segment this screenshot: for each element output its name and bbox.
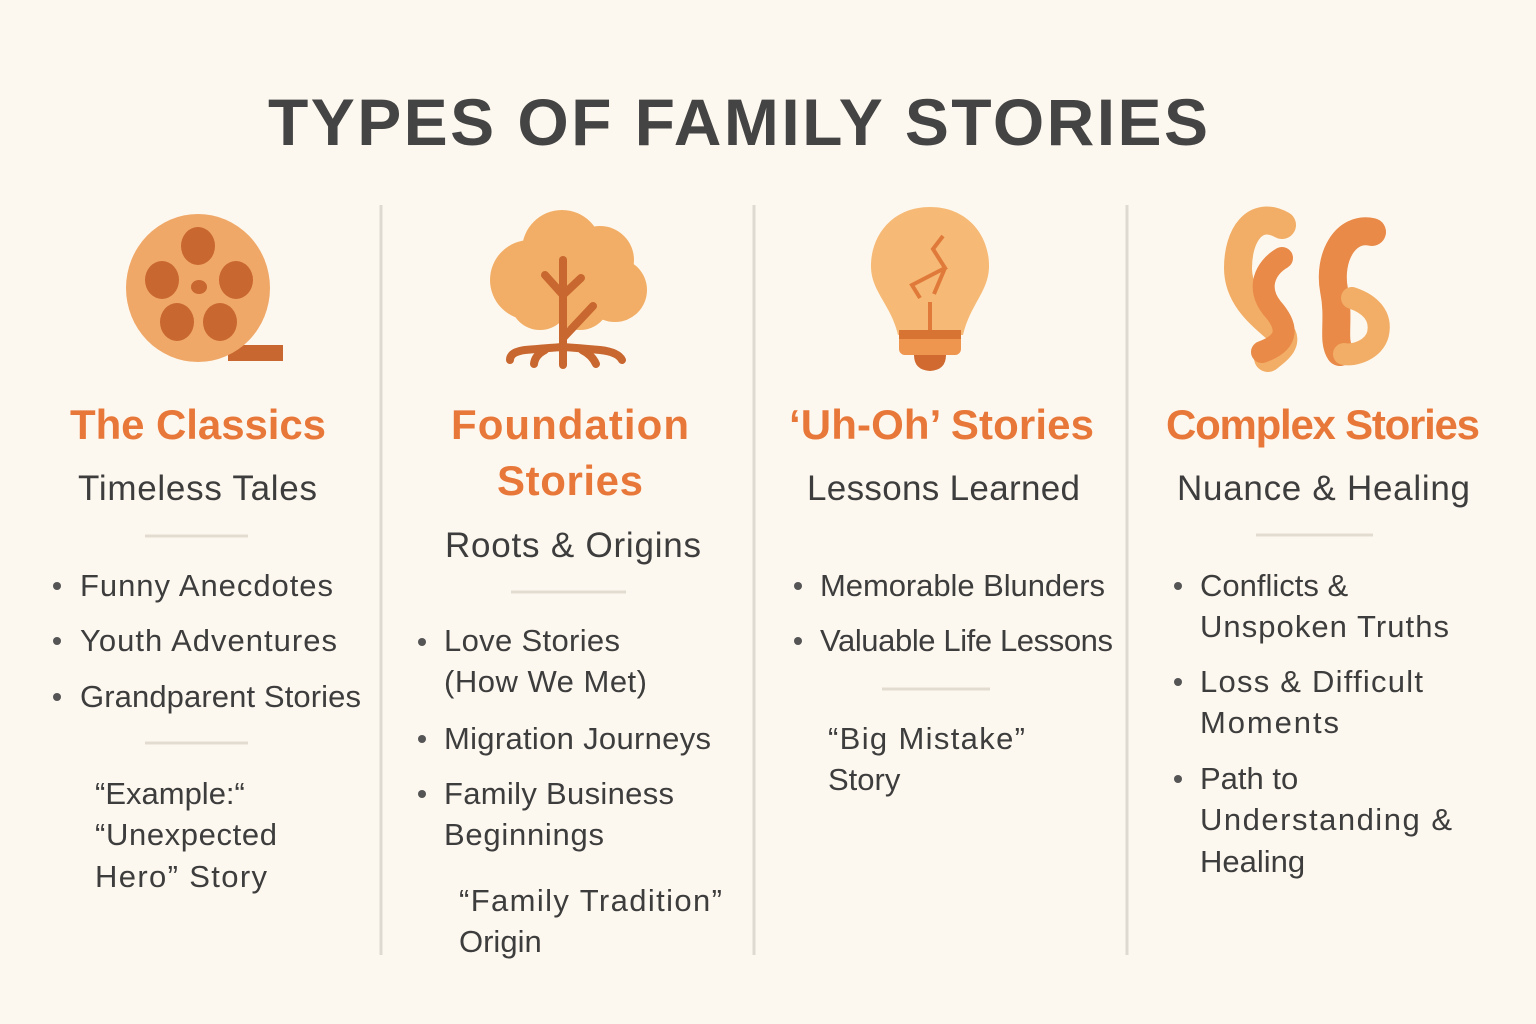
bullet list: Moments — [1200, 705, 1339, 740]
title: TYPES OF FAMILY STORIES — [268, 85, 1208, 159]
bullet list: Funny Anecdotes — [80, 568, 333, 603]
bullet list: Unspoken Truths — [1200, 609, 1449, 644]
heading: ‘Uh-Oh’ Stories — [789, 401, 1094, 448]
example text — [828, 721, 1025, 797]
example text: Origin — [459, 924, 542, 959]
icon: light bulb — [871, 207, 989, 371]
bullet list: Family Business — [444, 776, 674, 811]
example text: “Family Tradition” — [459, 883, 722, 918]
bullet list: Conflicts & — [1200, 568, 1348, 603]
bullet list: Healing — [1200, 844, 1305, 879]
example text: “Unexpected — [95, 817, 277, 852]
bullet list: Loss & Difficult — [1200, 664, 1423, 699]
bullet list — [418, 623, 711, 852]
bullet list — [1174, 568, 1452, 879]
panel: uh-oh stories — [789, 207, 1113, 797]
bullet list: Memorable Blunders — [820, 568, 1105, 603]
heading — [451, 401, 689, 504]
example text: Story — [828, 762, 901, 797]
panel: foundation stories — [418, 210, 722, 959]
heading: The Classics — [70, 401, 326, 448]
icon: intertwined shapes — [1238, 221, 1379, 358]
bullet list: (How We Met) — [444, 664, 647, 699]
panel: complex stories — [1166, 221, 1480, 879]
bullet list — [53, 568, 361, 714]
icon: tree — [490, 210, 647, 365]
icon: film reel — [126, 214, 283, 362]
example text: “Big Mistake” — [828, 721, 1025, 756]
subtitle: Nuance & Healing — [1177, 469, 1470, 508]
bullet list: Grandparent Stories — [80, 679, 361, 714]
bullet list: Love Stories — [444, 623, 620, 658]
bullet list: Beginnings — [444, 817, 604, 852]
example text — [95, 776, 277, 894]
subtitle: Roots & Origins — [445, 526, 701, 565]
example text: Hero” Story — [95, 859, 268, 894]
bullet list: Path to — [1200, 761, 1298, 796]
example text: “Example:“ — [95, 776, 245, 811]
bullet list: Youth Adventures — [80, 623, 337, 658]
bullet list: Understanding & — [1200, 802, 1452, 837]
bullet list: Migration Journeys — [444, 721, 711, 756]
subtitle: Timeless Tales — [78, 469, 317, 508]
subtitle: Lessons Learned — [807, 469, 1080, 508]
bullet list: Valuable Life Lessons — [820, 623, 1113, 658]
bullet list — [794, 568, 1113, 658]
heading: Complex Stories — [1166, 401, 1480, 448]
example text — [459, 883, 722, 959]
heading: Foundation — [451, 401, 689, 448]
panel: the classics — [53, 214, 361, 894]
heading: Stories — [497, 457, 643, 504]
